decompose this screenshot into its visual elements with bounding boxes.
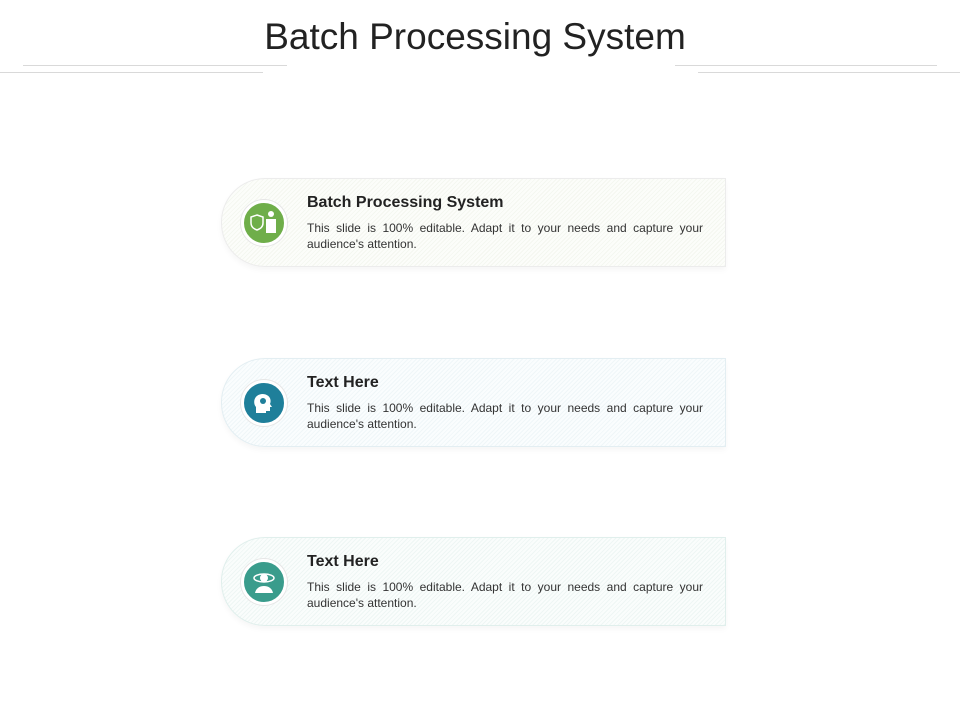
text 2: This slide is 100% editable. Adapt it to your needs and capture your audience's attention. (307, 401, 703, 431)
panel: card 3 (221, 537, 726, 626)
heading 2: Text Here (307, 374, 379, 391)
icon: head gear (241, 380, 287, 426)
text 1: This slide is 100% editable. Adapt it to your needs and capture your audience's attention. (307, 221, 703, 251)
icon: shield person (241, 200, 287, 246)
text 3: This slide is 100% editable. Adapt it to your needs and capture your audience's attention. (307, 580, 703, 610)
heading 3: Text Here (307, 553, 379, 570)
panel: card 1 (221, 178, 726, 267)
icon: atom person (241, 559, 287, 605)
title: Batch Processing System (264, 16, 686, 57)
heading 1: Batch Processing System (307, 194, 504, 211)
panel: card 2 (221, 358, 726, 447)
